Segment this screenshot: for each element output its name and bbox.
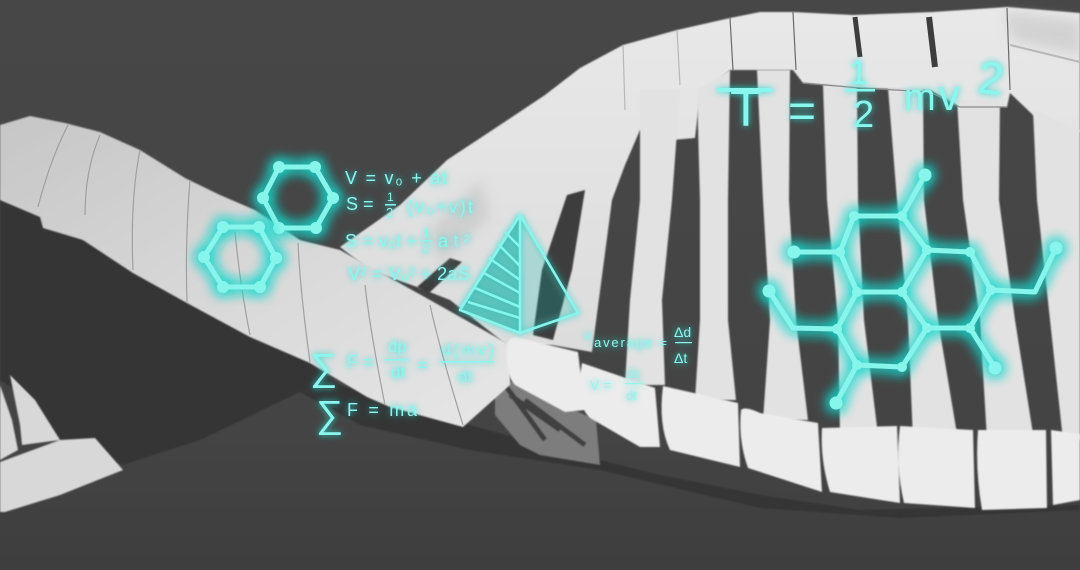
rungs (625, 70, 1080, 440)
kinetic energy formula: 1 (849, 54, 868, 92)
momentum force equation: ∑ (310, 347, 337, 389)
shadow beneath left strand (0, 200, 1080, 518)
momentum force equation: dp (388, 337, 407, 356)
kinetic energy formula (717, 51, 1006, 138)
second displacement equation: 2 (422, 241, 429, 256)
average velocity equation (584, 324, 692, 403)
displacement equation: 1 (387, 190, 394, 204)
newton second law: F = ma (347, 400, 418, 420)
average velocity equation: average = (594, 335, 667, 350)
momentum force equation: = (417, 355, 428, 375)
far backbone and twisted mass (340, 7, 1080, 352)
left backbone strand (0, 116, 510, 427)
newton second law: ∑ (316, 394, 343, 436)
hexagon ring two (200, 224, 280, 290)
kinetic energy formula: 2 (853, 94, 874, 136)
force equations (310, 337, 494, 436)
bottom backbone blocks (507, 337, 1080, 510)
kinetic energy formula: = (788, 85, 816, 138)
second displacement equation (345, 226, 470, 256)
bottom-left rung fragments and block (0, 375, 123, 512)
dark gaps in twist (417, 190, 585, 340)
kinetic energy formula: 2 (976, 51, 1006, 105)
instantaneous velocity equation: ds (626, 366, 640, 381)
momentum force equation: F = (347, 352, 374, 372)
instantaneous velocity equation: V = (590, 377, 611, 393)
pyramid (460, 215, 578, 333)
molecule atoms (762, 168, 1062, 410)
kinetic energy formula: T (730, 80, 762, 138)
instantaneous velocity equation: dt (626, 388, 637, 403)
faint shading on the upper backbone (430, 12, 1080, 265)
instantaneous velocity equation (590, 366, 643, 403)
velocity equation: V = v₀ + at (345, 168, 447, 188)
molecule: fused hexagon structure (762, 168, 1062, 410)
under-strand debris below blocks (495, 375, 600, 465)
kinetic energy formula: m (904, 77, 936, 119)
seams on left backbone (38, 125, 463, 425)
displacement equation: S = (346, 194, 374, 214)
kinetic energy formula: v (938, 71, 960, 120)
second displacement equation: S = v₀t + (345, 231, 417, 251)
equations of motion (345, 168, 473, 284)
average velocity equation: Δd (674, 324, 691, 340)
velocity squared equation: V² = V₀² + 2aS (348, 264, 470, 284)
momentum force equation: dt (458, 367, 472, 386)
hexagon ring one (260, 164, 336, 232)
seams on upper backbone (623, 8, 1080, 110)
displacement equation (346, 190, 473, 220)
molecule bonds (769, 175, 1056, 403)
second displacement equation: 1 (423, 226, 430, 240)
momentum force equation: d(mv) (442, 342, 494, 359)
second displacement equation: at² (438, 231, 470, 251)
displacement equation: 2 (386, 205, 393, 220)
displacement equation: (v₀+v)t (407, 197, 473, 217)
newton second law (316, 394, 418, 436)
average velocity equation: V (584, 331, 592, 343)
momentum force equation (310, 337, 494, 389)
average velocity equation: Δt (674, 350, 687, 366)
momentum force equation: dt (391, 363, 405, 382)
